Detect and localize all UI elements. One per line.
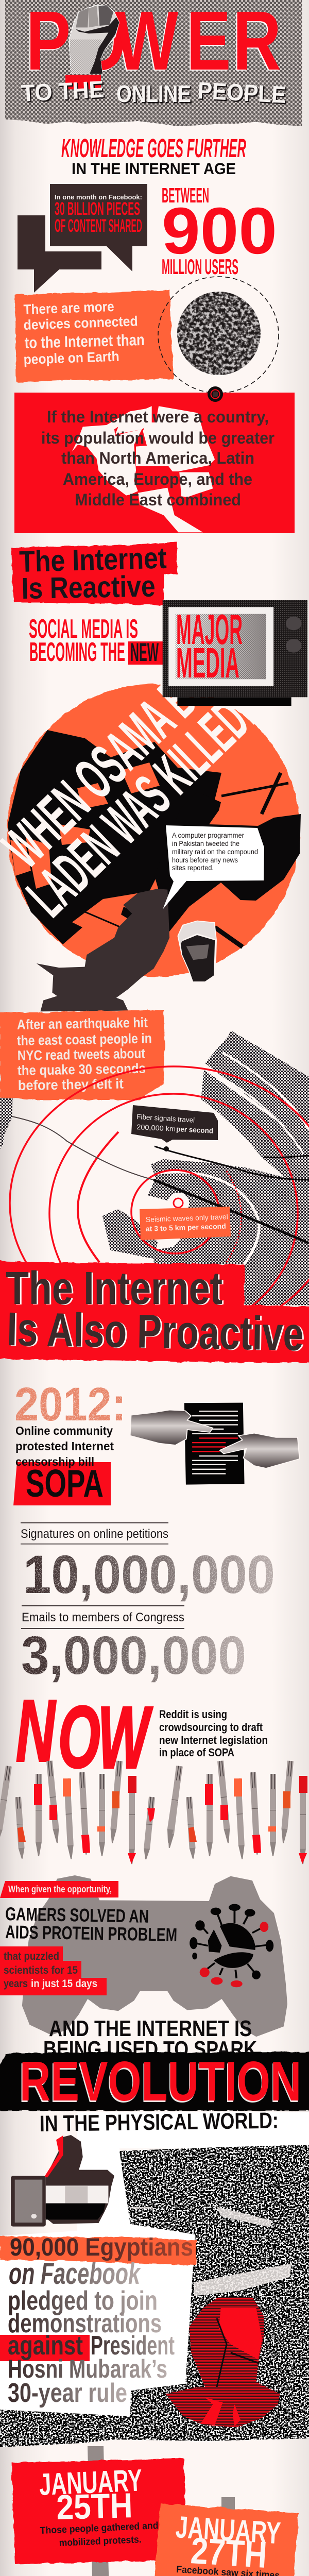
text: OF CONTENT SHARED	[55, 216, 142, 236]
text: reddit crowdsourcing: crowdsourcing to draft	[159, 1721, 263, 1734]
panel: puzzled scientists: in just 15 days	[31, 1978, 97, 1990]
country comparison text: Middle East combined	[75, 490, 241, 509]
stats: signatures and emails	[21, 1522, 275, 1686]
callout: fiber signals: per second	[176, 1125, 214, 1135]
number: three million: 3,000,000	[21, 1625, 246, 1686]
panel: 90,000 egyptians: 90,000 Egyptians	[10, 2234, 193, 2261]
emails label: Emails to members of Congress	[22, 1611, 184, 1624]
heading: the internet is reactive: The Internet	[19, 541, 167, 579]
hosni mubarak's: Hosni Mubarak’s	[8, 2354, 167, 2383]
heading: the internet is also proactive	[0, 1261, 309, 1363]
text: gamers solved an aids protein problem: AIDS PROTEIN PROBLEM	[5, 1921, 178, 1945]
illustration: protest sign january 25	[11, 2446, 185, 2576]
stat: between 900 million users: BETWEEN	[162, 183, 209, 207]
text: reddit crowdsourcing: Reddit is using	[159, 1708, 227, 1721]
chart: seismic wave rings	[10, 1066, 309, 1340]
headline: when osama bin laden was killed	[0, 646, 267, 929]
text: major media	[176, 605, 243, 687]
30 billion pieces: 30 BILLION PIECES	[55, 199, 140, 219]
callout: computer programmer tweet: military raid on the compound	[172, 848, 258, 856]
panel: earthquake callout: before they felt it	[18, 1076, 124, 1093]
illustration: protest sign january 25: Those people gathered and	[40, 2520, 159, 2536]
red strip against	[0, 2335, 90, 2361]
text: online community	[15, 1424, 114, 1453]
country comparison text: than North America, Latin	[61, 449, 254, 467]
callout: seismic waves: Seismic waves only travel	[146, 1212, 228, 1224]
rule	[21, 1628, 184, 1629]
icon: crowd globe with orbit	[158, 277, 279, 393]
subtitle: to the online people: ONLINE	[117, 81, 192, 108]
panel: puzzled scientists: years	[4, 1978, 28, 1990]
panel: devices callout: There are more	[23, 299, 114, 317]
callout: computer programmer tweet: hours before any news	[172, 856, 238, 864]
against president: against	[8, 2331, 83, 2361]
panel: devices callout: people on Earth	[23, 349, 119, 367]
left hand	[130, 1410, 213, 1445]
stat: 2012: 2012:	[14, 1378, 126, 1431]
heading: NOW: NOW	[16, 1682, 153, 1786]
panel: puzzled scientists	[0, 1946, 107, 1995]
heading: in the internet age: IN THE INTERNET AGE	[72, 159, 236, 178]
portrait: bin laden	[177, 921, 217, 982]
panel: 90,000 egyptians	[0, 2234, 196, 2408]
label: SOPA: censorship bill	[15, 1455, 94, 1468]
right hand	[220, 1433, 300, 1468]
callout: fiber signals: Fiber signals travel	[136, 1112, 195, 1124]
callout: computer programmer tweet: sites reported.	[172, 864, 214, 872]
text: reddit crowdsourcing: new Internet legislation	[159, 1734, 268, 1747]
country comparison text	[41, 408, 274, 509]
label: SOPA: SOPA	[26, 1462, 104, 1505]
subtitle: to the online people: TO THE	[22, 77, 106, 108]
world map cutout	[72, 406, 215, 532]
text: reddit crowdsourcing: in place of SOPA	[159, 1746, 234, 1759]
banner: when given the opportunity	[0, 1881, 118, 1898]
callout: computer programmer tweet	[163, 825, 264, 909]
illustration: protest sign january 25: mobilized protests.	[59, 2534, 142, 2549]
heading: the internet is also proactive: The Internet	[7, 1263, 224, 1315]
panel: internet as a country	[14, 393, 295, 533]
30-year rule: 30-year rule	[8, 2378, 127, 2408]
demonstrations: demonstrations	[8, 2309, 162, 2338]
text: online community: Online community	[15, 1424, 113, 1437]
country comparison text: If the Internet were a country,	[47, 408, 269, 426]
illustration: television with major media	[163, 600, 307, 706]
text: and the internet is being used to spark: BEING USED TO SPARK	[43, 2037, 257, 2062]
stat: between 900 million users: 900	[162, 194, 277, 268]
illustration: protest sign january 25: JANUARY	[39, 2463, 143, 2502]
illustration: fiber cable	[12, 1116, 309, 1243]
country comparison text: its population would be greater	[41, 429, 274, 447]
text: online community: protested Internet	[15, 1439, 114, 1453]
illustration: fingerprint halftone	[0, 1030, 309, 1305]
panel: devices callout	[15, 290, 174, 382]
text: social media is becoming the new	[29, 614, 164, 667]
illustration: protest sign january 25: 25TH	[56, 2486, 133, 2527]
panel: devices callout: to the Internet than	[24, 331, 145, 352]
subtitle: to the online people: ONLINE	[116, 80, 191, 107]
banner: when given the opportunity: When given the opportunity,	[8, 1884, 112, 1894]
callout: computer programmer tweet: in Pakistan tweeted the	[172, 840, 239, 848]
heading: the internet is reactive: Is Reactive	[21, 569, 156, 605]
icon: orbit target	[208, 386, 223, 402]
illustration: document and pointing hands	[130, 1403, 300, 1485]
callout: computer programmer tweet: A computer programmer	[172, 832, 244, 839]
torn halftone header background	[5, 0, 302, 126]
panel: earthquake callout: After an earthquake hit	[17, 1015, 148, 1032]
orange gaps in silhouette	[10, 762, 160, 889]
panel: earthquake callout	[0, 1010, 165, 1100]
black compound silhouette	[8, 730, 301, 947]
illustration: game controller	[22, 1875, 287, 2037]
text: and the internet is being used to spark: AND THE INTERNET IS	[49, 2016, 252, 2041]
map: pakistan	[37, 889, 169, 1011]
panel: earthquake callout: the quake 30 seconds	[18, 1061, 146, 1078]
subtitle: to the online people: TO THE	[21, 76, 105, 107]
callout: seismic waves: at 3 to 5 km per second	[146, 1222, 226, 1233]
text: social media is becoming the new: NEW	[130, 638, 159, 667]
illustration: row of pens	[0, 1760, 309, 1864]
illustration: protest sign january 27	[153, 2497, 299, 2576]
panel: 90,000 egyptians: President	[91, 2331, 175, 2361]
subtitle: to the online people	[21, 76, 288, 109]
text: gamers solved an aids protein problem: GAMERS SOLVED AN	[5, 1903, 149, 1927]
label: SOPA	[13, 1455, 111, 1505]
rule top	[21, 1522, 168, 1523]
number: ten million: 10,000,000	[23, 1545, 275, 1605]
callout: seismic waves	[140, 1207, 231, 1240]
photo: egyptian protest crowd	[0, 2112, 309, 2447]
subtitle: to the online people: PEOPLE	[197, 77, 287, 108]
panel: facebook speech bubble	[50, 184, 147, 272]
panel: devices callout: devices connected	[23, 313, 138, 333]
pledged to join: pledged to join	[8, 2286, 158, 2316]
subtitle: to the online people: PEOPLE	[198, 78, 288, 109]
icon: thumbs up egyptian flag	[11, 2135, 114, 2227]
callout: fiber signals: 200,000 km	[136, 1123, 176, 1133]
rule	[21, 1544, 168, 1545]
panel: osama bin laden circle	[0, 646, 301, 1011]
icon: raised fist	[65, 5, 119, 89]
facebook intro text: In one month on Facebook:	[55, 193, 142, 201]
panel: puzzled scientists: scientists for 15	[4, 1964, 78, 1976]
callout: fiber signals	[131, 1105, 218, 1151]
on facebook: on Facebook	[9, 2257, 141, 2291]
rule	[22, 1605, 184, 1606]
text: social media is becoming the new: SOCIAL MEDIA IS	[29, 614, 138, 644]
heading: the internet is also proactive: The Internet	[6, 1263, 222, 1314]
panel: earthquake callout: the east coast people in	[17, 1030, 152, 1048]
text: gamers solved an aids protein problem	[5, 1903, 178, 1945]
heading: the internet is reactive	[11, 541, 178, 605]
panel: puzzled scientists: that puzzled	[4, 1951, 59, 1962]
portrait: hosni mubarak	[165, 2297, 280, 2428]
icon: virus	[190, 1904, 273, 1987]
text: reddit crowdsourcing	[159, 1708, 268, 1759]
signatures label: Signatures on online petitions	[21, 1527, 168, 1541]
illustration: protest sign january 27: 27TH	[190, 2530, 268, 2576]
icon: back speech bubble	[18, 215, 101, 293]
orange torn circle	[7, 684, 300, 977]
panel: earthquake callout: NYC read tweets about	[18, 1046, 145, 1063]
text: and the internet is being used to spark	[43, 2016, 257, 2062]
panel: header	[5, 0, 302, 126]
text: social media is becoming the new: BECOMING THE	[29, 637, 125, 667]
country comparison text: America, Europe, and the	[63, 470, 252, 488]
